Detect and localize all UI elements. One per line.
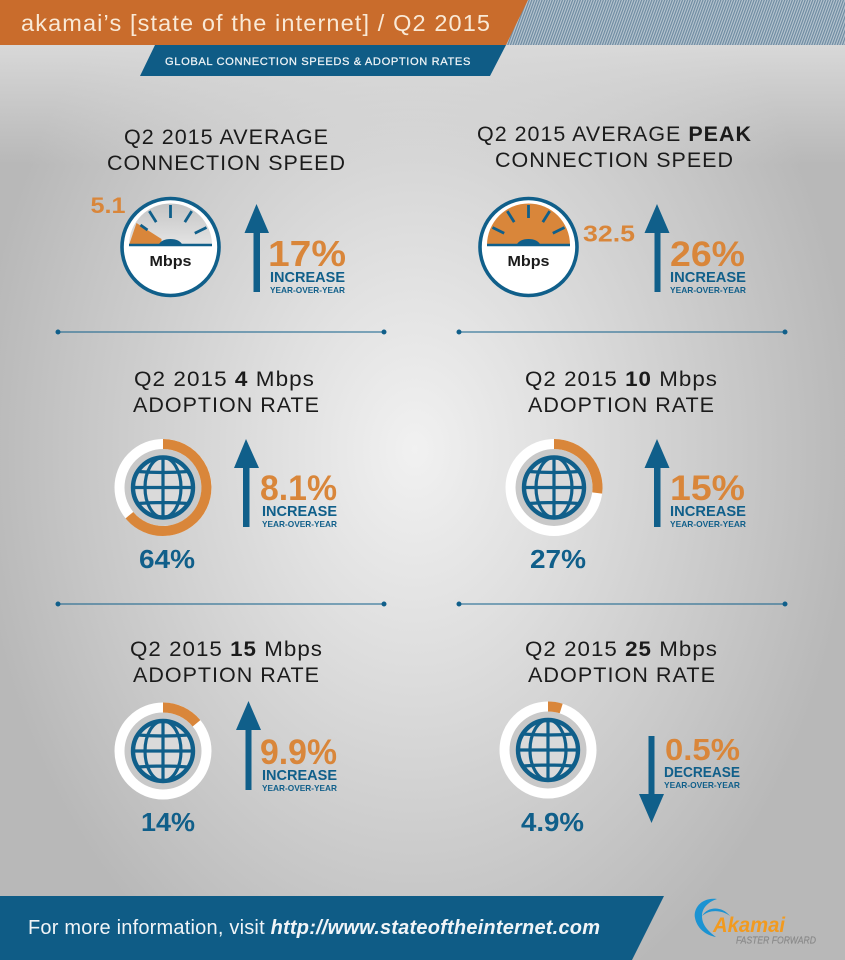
heading: Q2 2015 25 Mbps [525, 637, 718, 661]
value: 27% [530, 544, 586, 574]
change: 9.9% increase [260, 733, 337, 793]
change: 17% increase [268, 233, 346, 295]
change: 8.1% increase: YEAR-OVER-YEAR [262, 519, 337, 529]
panel: 15 Mbps adoption [120, 637, 337, 837]
heading: ADOPTION RATE [133, 663, 320, 687]
value: 4.9% [521, 807, 584, 837]
footer banner [0, 896, 664, 960]
subtitle banner [140, 45, 506, 76]
heading [130, 637, 323, 687]
change: 0.5% decrease: DECREASE [664, 764, 740, 781]
panel: average connection speed [90, 125, 346, 296]
gauge: 32.5 Mbps [480, 198, 577, 296]
header title bar: akamai’s [state of the internet] / Q2 2015 [21, 10, 490, 36]
heading: ADOPTION RATE [528, 393, 715, 417]
change: 15% increase: YEAR-OVER-YEAR [670, 519, 746, 529]
change: 15% increase: INCREASE [670, 503, 746, 520]
value: 5.1 [90, 193, 126, 218]
change: 26% increase: YEAR-OVER-YEAR [670, 285, 746, 295]
change: 17% increase: INCREASE [270, 269, 345, 286]
change: 26% increase: INCREASE [670, 269, 746, 286]
panel: 10 Mbps adoption [510, 367, 746, 574]
panel: average peak connection speed [477, 122, 752, 296]
gauge: 5.1 Mbps: Mbps [150, 253, 191, 270]
heading: Q2 2015 AVERAGE [124, 125, 329, 149]
panel: 4 Mbps adoption [120, 367, 337, 574]
change: 0.5% decrease [664, 732, 740, 790]
change: 8.1% increase: INCREASE [262, 503, 337, 520]
arrow up [644, 439, 670, 527]
change: 8.1% increase [260, 469, 337, 529]
heading [133, 367, 320, 417]
header hatch band [506, 0, 845, 45]
heading: Q2 2015 15 Mbps [130, 637, 323, 661]
heading: Q2 2015 10 Mbps [525, 367, 718, 391]
change: 0.5% decrease: 0.5% [665, 732, 740, 767]
value: 64% [139, 544, 195, 574]
heading [525, 367, 718, 417]
heading: CONNECTION SPEED [107, 151, 346, 175]
donut: 4.9% [504, 706, 592, 794]
logo: Akamai [695, 899, 816, 946]
value: 14% [141, 807, 195, 837]
gauge: 32.5 Mbps: Mbps [508, 253, 549, 270]
arrow up [234, 439, 259, 527]
logo: Akamai: FASTER FORWARD [736, 934, 816, 946]
change: 17% increase: 17% [268, 233, 346, 274]
donut: 64% [120, 444, 206, 531]
heading: ADOPTION RATE [133, 393, 320, 417]
change: 0.5% decrease: YEAR-OVER-YEAR [664, 780, 740, 790]
heading: Q2 2015 AVERAGE PEAK [477, 122, 752, 146]
value: 32.5 [583, 220, 635, 246]
logo: Akamai: Akamai [712, 914, 786, 937]
change: 8.1% increase: 8.1% [260, 469, 337, 508]
heading: CONNECTION SPEED [495, 148, 734, 172]
gauge: 5.1 Mbps [122, 198, 219, 296]
panel: 25 Mbps adoption [504, 637, 740, 837]
heading [477, 122, 752, 172]
change: 17% increase: YEAR-OVER-YEAR [270, 285, 345, 295]
header title bar [0, 0, 528, 45]
change: 26% increase [670, 235, 746, 295]
heading: ADOPTION RATE [528, 663, 716, 687]
change: 26% increase: 26% [670, 235, 745, 274]
arrow up [236, 701, 261, 790]
change: 9.9% increase: 9.9% [260, 733, 337, 772]
heading: Q2 2015 4 Mbps [134, 367, 315, 391]
change: 9.9% increase: YEAR-OVER-YEAR [262, 783, 337, 793]
arrow up [244, 204, 269, 292]
arrow up [644, 204, 670, 292]
heading [525, 637, 718, 687]
donut: 14% [120, 708, 206, 794]
donut: 27% [510, 444, 598, 531]
footer banner: For more information, visit http://www.stateoftheinternet.com [28, 917, 600, 939]
subtitle banner: GLOBAL CONNECTION SPEEDS & ADOPTION RATES [165, 56, 471, 68]
arrow down [639, 736, 664, 823]
heading [107, 125, 346, 175]
change: 9.9% increase: INCREASE [262, 767, 337, 784]
change: 15% increase: 15% [670, 469, 745, 508]
change: 15% increase [670, 469, 746, 529]
